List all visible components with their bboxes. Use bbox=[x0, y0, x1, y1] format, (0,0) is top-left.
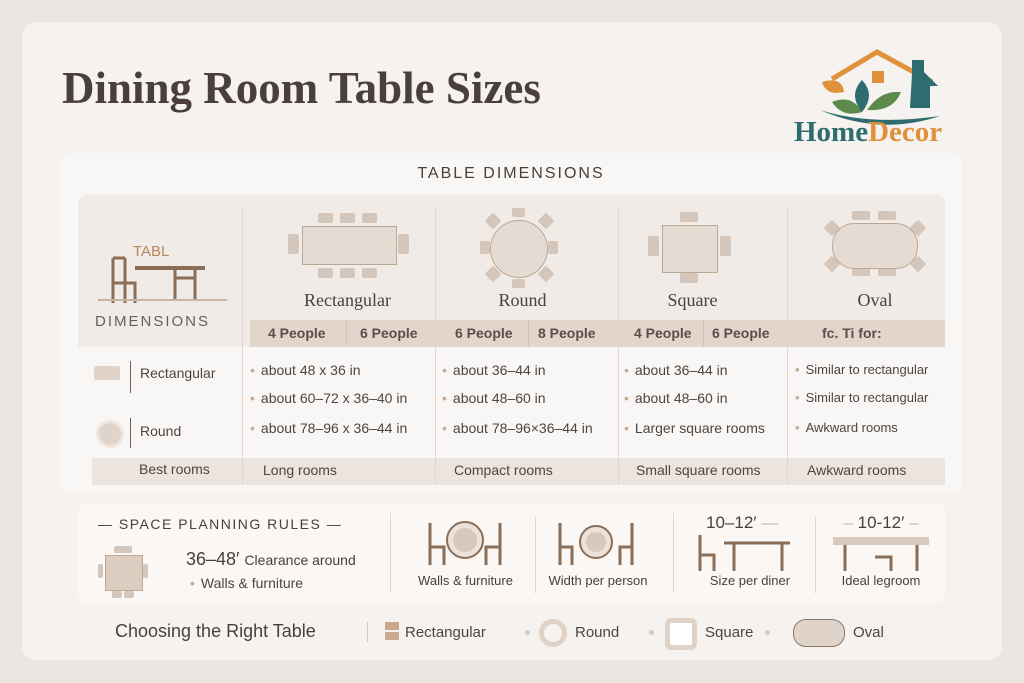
people sub-headers: 6 People bbox=[712, 325, 770, 341]
rule: width per person: Width per person bbox=[548, 573, 648, 588]
title: Dining Room Table Sizes bbox=[62, 63, 541, 113]
row labels: Rectangular bbox=[140, 365, 216, 381]
round values: • about 78–96×36–44 in bbox=[442, 420, 593, 436]
square values: • Larger square rooms bbox=[624, 420, 765, 436]
column header: rectangular: Rectangular bbox=[304, 290, 391, 310]
table grid bbox=[78, 195, 945, 485]
people sub-headers: 6 People bbox=[360, 325, 418, 341]
best rooms row: Compact rooms bbox=[454, 462, 553, 478]
logo text: HomeDecor bbox=[794, 116, 942, 148]
table dimensions panel bbox=[60, 153, 962, 493]
rule: size per diner: Size per diner bbox=[710, 573, 790, 588]
legend: choosing the right table: Oval bbox=[853, 624, 884, 641]
dimensions label: DIMENSIONS bbox=[95, 313, 210, 330]
rectangular values: • about 78–96 x 36–44 in bbox=[250, 420, 407, 436]
square values: • about 36–44 in bbox=[624, 362, 728, 378]
oval values bbox=[795, 362, 928, 435]
column header: oval: Oval bbox=[858, 290, 892, 310]
people sub-headers: 4 People bbox=[268, 325, 326, 341]
row labels: Round bbox=[140, 423, 181, 439]
rectangular values: • about 48 x 36 in bbox=[250, 362, 361, 378]
rule: width per person bbox=[548, 523, 648, 588]
column header: round: Round bbox=[498, 290, 546, 310]
rule: walls & furniture: Walls & furniture bbox=[418, 573, 513, 588]
rule: size per diner: 10–12′ — bbox=[706, 513, 778, 532]
logo bbox=[820, 49, 940, 125]
legend: choosing the right table: Choosing the Right Table bbox=[115, 621, 316, 641]
column header: round bbox=[480, 208, 558, 310]
round values: • about 48–60 in bbox=[442, 390, 546, 406]
square values bbox=[624, 362, 765, 436]
icon: table with chair: TABL bbox=[133, 243, 169, 260]
rule: ideal legroom bbox=[833, 513, 929, 588]
rules heading: — SPACE PLANNING RULES — bbox=[98, 516, 342, 532]
people sub-headers bbox=[268, 325, 882, 341]
best rooms row: Awkward rooms bbox=[807, 462, 906, 478]
best rooms row: Best rooms bbox=[139, 461, 210, 477]
best rooms row: Small square rooms bbox=[636, 462, 760, 478]
icon: table with chair bbox=[98, 243, 227, 303]
legend: choosing the right table bbox=[115, 618, 884, 650]
oval values: • Similar to rectangular bbox=[795, 390, 928, 405]
round values bbox=[442, 362, 593, 436]
people sub-headers: 6 People bbox=[455, 325, 513, 341]
column header: rectangular bbox=[288, 213, 409, 310]
column header: square bbox=[648, 212, 731, 310]
column header: square: Square bbox=[668, 290, 717, 310]
legend: choosing the right table: Rectangular bbox=[405, 624, 486, 641]
best rooms row: Long rooms bbox=[263, 462, 337, 478]
best rooms row bbox=[139, 461, 906, 478]
people sub-headers: 4 People bbox=[634, 325, 692, 341]
rectangular values: • about 60–72 x 36–40 in bbox=[250, 390, 407, 406]
people sub-headers: fc. Ti for: bbox=[822, 325, 882, 341]
square values: • about 48–60 in bbox=[624, 390, 728, 406]
column header: oval bbox=[824, 211, 926, 310]
rule: walls & furniture bbox=[418, 521, 513, 588]
panel: space planning rules: • Walls & furniture bbox=[190, 575, 303, 591]
icon: table top view bbox=[98, 546, 148, 598]
people sub-headers: 8 People bbox=[538, 325, 596, 341]
clearance text: 36–48′ Clearance around bbox=[186, 549, 356, 569]
legend: choosing the right table: Square bbox=[705, 624, 753, 641]
oval values: • Awkward rooms bbox=[795, 420, 898, 435]
rule: size per diner bbox=[698, 513, 790, 588]
rule: ideal legroom: Ideal legroom bbox=[842, 573, 920, 588]
panel: space planning rules bbox=[78, 503, 945, 603]
rectangular values bbox=[250, 362, 407, 436]
row labels bbox=[94, 361, 216, 448]
legend: choosing the right table: Round bbox=[575, 624, 619, 641]
round values: • about 36–44 in bbox=[442, 362, 546, 378]
rule: ideal legroom: – 10-12′ – bbox=[843, 513, 919, 532]
panel heading: TABLE DIMENSIONS bbox=[417, 165, 605, 182]
oval values: • Similar to rectangular bbox=[795, 362, 928, 377]
